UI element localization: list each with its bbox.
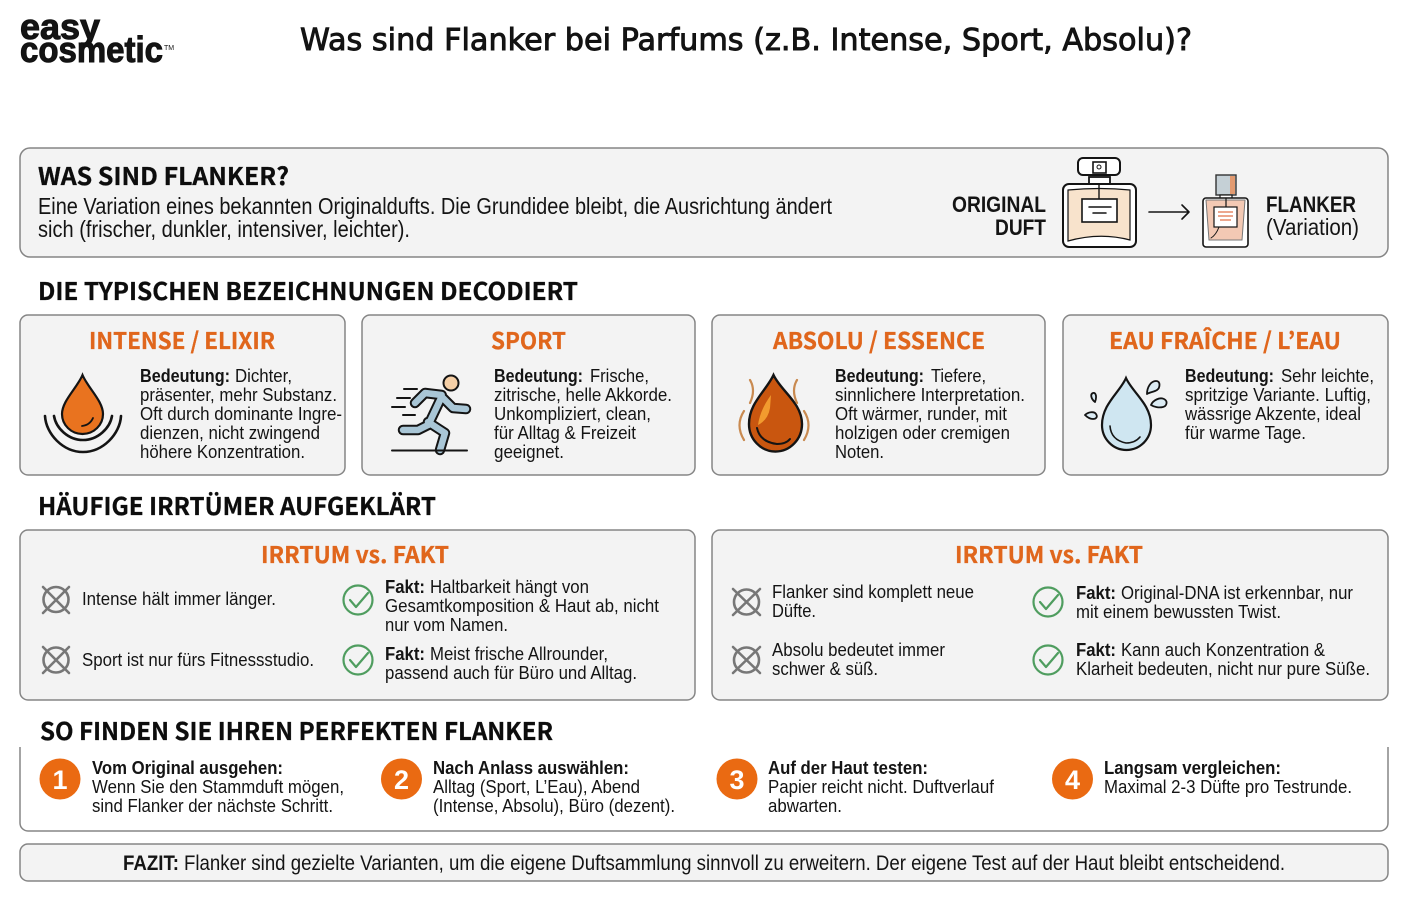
card title: sport: SPORT (491, 322, 566, 356)
icon: cross marker 3 (733, 589, 760, 615)
icon: cross marker 2 (43, 647, 69, 673)
logo: easy cosmetic: easy (20, 6, 100, 47)
text block: intense meaning: präsenter, mehr Substanz. (140, 385, 337, 405)
fact text 2: passend auch für Büro und Alltag. (385, 663, 637, 683)
fact text 1 (385, 577, 659, 635)
text block: absolu meaning: sinnlichere Interpretation. (835, 385, 1025, 405)
panel: was sind flanker (20, 148, 1388, 257)
step 3 (716, 758, 995, 816)
panel: fazit: FAZIT: (123, 852, 179, 875)
text block: sport meaning: Frische, (590, 366, 649, 386)
fact text 2: Meist frische Allrounder, (430, 644, 608, 664)
fact text 3 (1076, 583, 1353, 622)
text block: absolu meaning: Oft wärmer, runder, mit (835, 404, 1007, 424)
icon: amber drop with waves (740, 375, 808, 452)
panel: fazit: Flanker sind gezielte Varianten, um die eigene Duftsammlung sinnvoll zu erweitern. Der eigene Test auf der Haut bleibt entscheidend. (184, 852, 1285, 875)
icon: check marker 2 (344, 646, 372, 674)
text block: sport meaning: zitrische, helle Akkorde. (494, 385, 672, 405)
fact text 3: Original-DNA ist erkennbar, nur (1121, 583, 1353, 603)
text block: eau fraiche meaning: Bedeutung: (1185, 366, 1274, 386)
title: Was sind Flanker bei Parfums (z.B. Intense, Sport, Absolu)? (300, 23, 1192, 58)
icon: original perfume bottle (1063, 158, 1136, 247)
icon: cross marker 1 (43, 587, 69, 613)
myth text 3: Flanker sind komplett neue (772, 582, 974, 602)
fact text 3: mit einem bewussten Twist. (1076, 602, 1281, 622)
label: flanker variation: FLANKER (1266, 192, 1356, 217)
step 4: Maximal 2-3 Düfte pro Testrunde. (1104, 777, 1352, 797)
logo: easy cosmetic (20, 6, 174, 70)
icon: orange drop with ripples (45, 375, 121, 452)
icon: check marker 3 (1034, 588, 1062, 616)
text block: eau fraiche meaning (1184, 366, 1374, 443)
step 2: Nach Anlass auswählen: (433, 758, 629, 778)
step 1: Wenn Sie den Stammduft mögen, (92, 777, 344, 797)
text block: absolu meaning: holzigen oder cremigen (835, 423, 1010, 443)
icon: check marker 1 (344, 586, 372, 614)
fact text 2: Fakt: (385, 644, 425, 664)
text block: sport meaning: für Alltag & Freizeit (494, 423, 636, 443)
panel: irrtum vs fakt right (712, 530, 1388, 700)
panel: intense elixir (20, 315, 345, 475)
label: flanker variation: (Variation) (1266, 214, 1359, 240)
text block: absolu meaning: Tiefere, (931, 366, 986, 386)
step 3: Papier reicht nicht. Duftverlauf (768, 777, 995, 797)
step 2: 2 (394, 765, 409, 795)
panel title: irrtum vs fakt left: IRRTUM vs. FAKT (261, 536, 449, 570)
fact text 1: Haltbarkeit hängt von (430, 577, 589, 597)
text block: eau fraiche meaning: spritzige Variante. Luftig, (1185, 385, 1371, 405)
step 1: Vom Original ausgehen: (92, 758, 283, 778)
card title: absolu essence: ABSOLU / ESSENCE (772, 322, 985, 356)
logo: easy cosmetic: TM (164, 45, 174, 52)
myth text 3: Düfte. (772, 601, 816, 621)
step 2: (Intense, Absolu), Büro (dezent). (433, 796, 675, 816)
fact text 1: Fakt: (385, 577, 425, 597)
text block: definition (38, 193, 833, 242)
text block: eau fraiche meaning: Sehr leichte, (1281, 366, 1374, 386)
icon: cross marker 4 (733, 647, 760, 673)
fact text 3: Fakt: (1076, 583, 1116, 603)
arrow (1149, 205, 1189, 219)
step 1: 1 (52, 765, 68, 795)
label: original duft: ORIGINAL (952, 192, 1046, 217)
myth text 1: Intense hält immer länger. (82, 589, 276, 609)
heading: haeufige irrtuemer aufgeklaert: HÄUFIGE IRRTÜMER AUFGEKLÄRT (38, 488, 436, 523)
logo: easy cosmetic: cosmetic (20, 29, 163, 70)
fact text 4: Fakt: (1076, 640, 1116, 660)
icon: check marker 4 (1034, 646, 1062, 674)
myth text 3 (772, 582, 974, 621)
text block: eau fraiche meaning: für warme Tage. (1185, 423, 1306, 443)
fact text 4: Kann auch Konzentration & (1121, 640, 1325, 660)
panel title: irrtum vs fakt right: IRRTUM vs. FAKT (955, 536, 1143, 570)
step 4: 4 (1065, 765, 1080, 795)
icon: water drop with splashes (1085, 378, 1167, 450)
text block: sport meaning (494, 366, 672, 462)
fact text 4: Klarheit bedeuten, nicht nur pure Süße. (1076, 659, 1370, 679)
text block: intense meaning: dienzen, nicht zwingend (140, 423, 320, 443)
panel: irrtum vs fakt left (20, 530, 695, 700)
fact text 4 (1076, 640, 1370, 679)
text block: intense meaning: Bedeutung: (140, 366, 230, 386)
panel: eau fraiche (1063, 315, 1388, 475)
step 1: sind Flanker der nächste Schritt. (92, 796, 333, 816)
text block: definition: sich (frischer, dunkler, intensiver, leichter). (38, 216, 410, 242)
text block: intense meaning: Oft durch dominante Ingre- (140, 404, 342, 424)
text block: definition: Eine Variation eines bekannten Originaldufts. Die Grundidee bleibt, die Ausrichtung ändert (38, 193, 833, 219)
text block: intense meaning (140, 366, 342, 462)
text block: sport meaning: Bedeutung: (494, 366, 583, 386)
text block: absolu meaning: Bedeutung: (835, 366, 924, 386)
step 1 (40, 758, 344, 816)
fact text 1: nur vom Namen. (385, 615, 508, 635)
step 4 (1052, 758, 1352, 800)
card title: eau fraiche: EAU FRAÎCHE / L’EAU (1109, 322, 1341, 356)
card title: intense elixir: INTENSE / ELIXIR (89, 322, 275, 356)
label: original duft (952, 192, 1046, 240)
panel: steps (20, 747, 1388, 831)
text block: sport meaning: Unkompliziert, clean, (494, 404, 651, 424)
label: original duft: DUFT (995, 215, 1046, 240)
myth text 2: Sport ist nur fürs Fitnessstudio. (82, 650, 314, 670)
step 3: 3 (729, 765, 745, 795)
myth text 4: schwer & süß. (772, 659, 878, 679)
myth text 4 (772, 640, 945, 679)
myth text 4: Absolu bedeutet immer (772, 640, 945, 660)
step 3: abwarten. (768, 796, 842, 816)
text block: intense meaning: höhere Konzentration. (140, 442, 305, 462)
text block: intense meaning: Dichter, (235, 366, 292, 386)
text block: sport meaning: geeignet. (494, 442, 564, 462)
step 2 (381, 758, 675, 816)
step 3: Auf der Haut testen: (768, 758, 928, 778)
icon: runner (392, 376, 467, 450)
heading: die typischen bezeichnungen decodiert: DIE TYPISCHEN BEZEICHNUNGEN DECODIERT (38, 273, 578, 308)
fact text 1: Gesamtkomposition & Haut ab, nicht (385, 596, 659, 616)
label: flanker variation (1266, 192, 1359, 240)
step 4: Langsam vergleichen: (1104, 758, 1281, 778)
text block: eau fraiche meaning: wässrige Akzente, ideal (1184, 404, 1361, 424)
icon: flanker perfume bottle (1203, 175, 1248, 247)
panel: fazit (20, 844, 1388, 881)
text block: absolu meaning: Noten. (835, 442, 884, 462)
panel: sport (362, 315, 695, 475)
heading: so finden sie ihren perfekten flanker: SO FINDEN SIE IHREN PERFEKTEN FLANKER (40, 713, 553, 748)
fact text 2 (385, 644, 637, 683)
heading: was sind flanker: WAS SIND FLANKER? (38, 158, 289, 193)
panel: absolu essence (712, 315, 1045, 475)
text block: absolu meaning (835, 366, 1025, 462)
step 2: Alltag (Sport, L’Eau), Abend (433, 777, 640, 797)
